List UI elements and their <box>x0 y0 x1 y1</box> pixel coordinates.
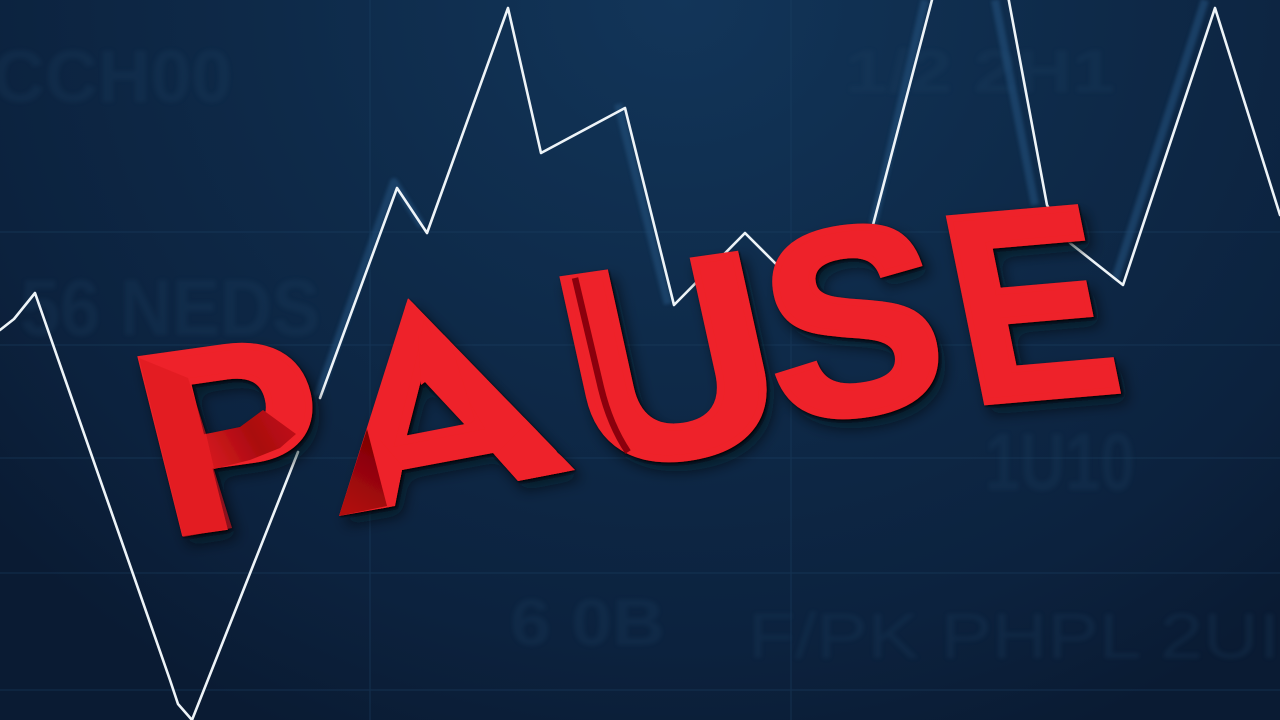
U stripe <box>575 278 628 452</box>
faded background data labels: 6 0B <box>510 585 665 659</box>
title word: PAUSE <box>137 204 1131 549</box>
A leg corrections <box>380 440 404 510</box>
letter E: E <box>922 149 1138 460</box>
P stem fold <box>139 358 232 537</box>
faded background data labels: F/PK PHPL 2UI <box>748 600 1280 672</box>
letter A: A <box>272 201 601 625</box>
faded background data labels: 56 NEDS <box>20 263 320 352</box>
letter A <box>339 298 581 528</box>
P bowl fold <box>206 410 296 469</box>
faded background data labels: 1/2 2H1 <box>845 38 1115 105</box>
letter U: U <box>534 195 807 528</box>
faded background data labels: 1U10 <box>985 417 1135 508</box>
A counter correction <box>420 335 470 426</box>
letter S: S <box>746 162 959 480</box>
letter P: P <box>110 283 359 589</box>
chart line echo shadow <box>318 0 1205 396</box>
A left leg fold <box>339 429 387 516</box>
